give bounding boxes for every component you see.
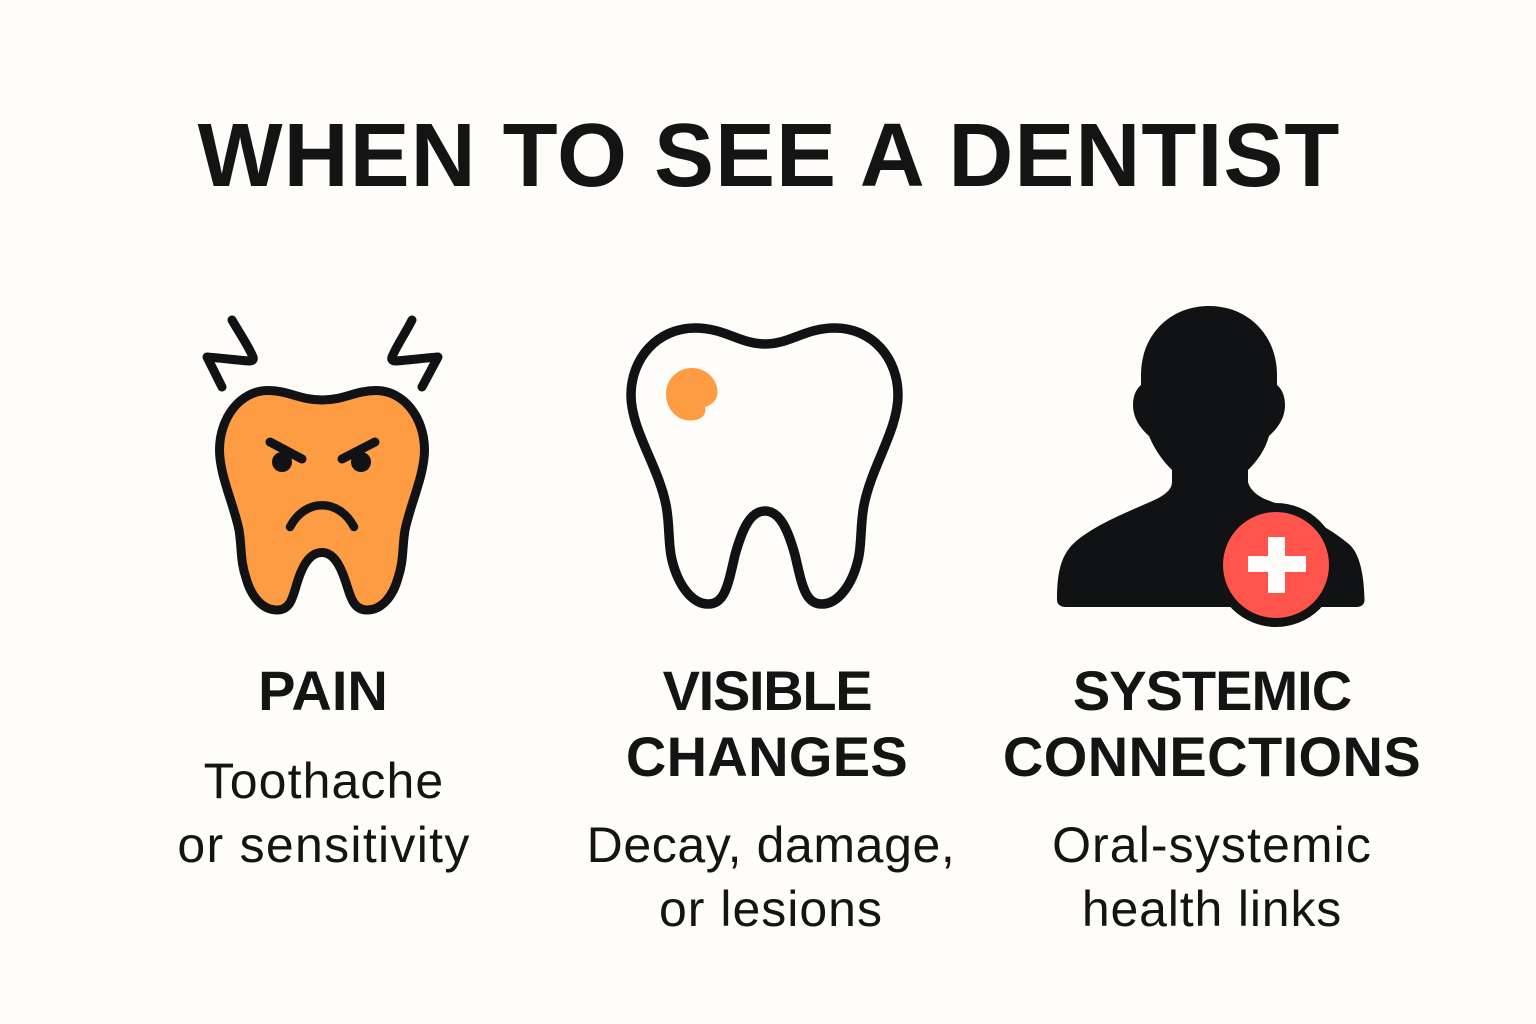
heading: pain: PAIN: [258, 659, 388, 722]
title: WHEN TO SEE A DENTIST: [198, 106, 1340, 206]
text: pain description: [177, 753, 471, 873]
heading: systemic connections: CONNECTIONS: [1003, 725, 1421, 788]
badge: [1218, 508, 1334, 622]
icon: tooth with decay spot: [631, 328, 898, 604]
text: systemic connections description: health links: [1082, 881, 1342, 937]
heading: systemic connections: SYSTEMIC: [1073, 659, 1351, 722]
text: pain description: Toothache: [204, 753, 444, 809]
heading: visible changes: [626, 659, 908, 788]
heading: visible changes: CHANGES: [626, 725, 908, 788]
text: systemic connections description: [1052, 817, 1372, 937]
text: visible changes description: Decay, damage,: [587, 817, 955, 873]
icon: person silhouette with medical badge: [1057, 306, 1364, 622]
heading: visible changes: VISIBLE: [663, 659, 871, 722]
text: visible changes description: or lesions: [659, 881, 883, 937]
text: pain description: or sensitivity: [177, 817, 471, 873]
icon: angry tooth: [207, 320, 438, 610]
text: systemic connections description: Oral-systemic: [1052, 817, 1372, 873]
heading: systemic connections: [1003, 659, 1421, 788]
text: visible changes description: [587, 817, 955, 937]
